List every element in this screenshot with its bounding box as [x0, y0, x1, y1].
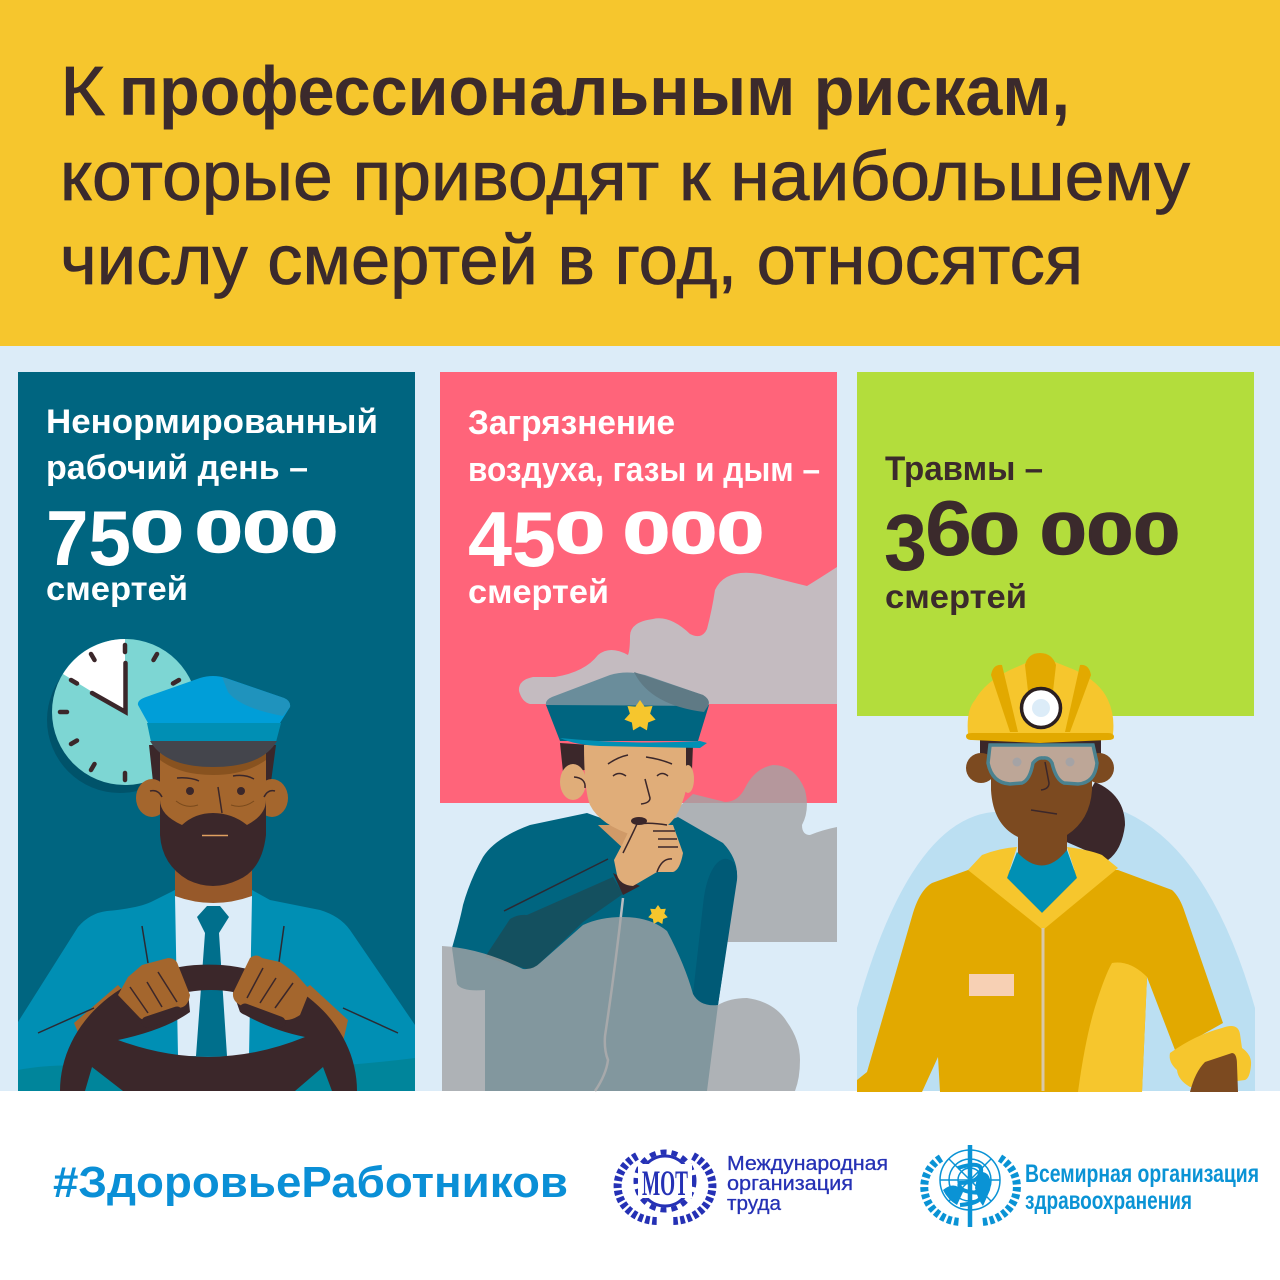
cap: [546, 705, 709, 741]
hand: [1190, 1053, 1238, 1092]
icon: clock: [47, 639, 198, 793]
hair: [980, 740, 1101, 755]
number: 360 000 deaths: 3: [884, 498, 927, 587]
right hand: [233, 956, 310, 1020]
number: 750 000 deaths: 75: [46, 494, 131, 582]
title: числу смертей в год, относятся: [60, 221, 1083, 299]
cuff: [613, 873, 640, 895]
number: 450 000 deaths: 0: [555, 501, 605, 566]
goggles: [988, 745, 1097, 784]
badge star: [648, 905, 668, 924]
title: которые приводят к наибольшему: [60, 137, 1190, 215]
continents: [943, 1172, 990, 1206]
beard: [160, 800, 266, 886]
helmet: [968, 662, 1113, 734]
background arch: [857, 812, 1255, 1091]
cap star: [624, 700, 656, 730]
ears: [560, 764, 586, 800]
number: 360 000 deaths: 0: [969, 502, 1020, 567]
number: 450 000 deaths: смертей: [468, 573, 609, 610]
number: 360 000 deaths: 000: [1040, 502, 1180, 567]
wreath: [924, 1158, 1017, 1222]
number: 450 000 deaths: 000: [623, 501, 764, 566]
visor: [150, 741, 277, 767]
panel heading: irregular hours: [46, 403, 378, 487]
ILO name: [727, 1153, 888, 1215]
cap: [138, 676, 290, 723]
jacket: [857, 870, 1223, 1092]
WHO name: [1025, 1160, 1259, 1215]
headlamp: [1022, 688, 1060, 728]
bottom band: [18, 1058, 415, 1091]
sleeve shade: [693, 859, 737, 1006]
ears: [966, 753, 996, 783]
number: 750 000 deaths: [46, 494, 338, 607]
left hand: [118, 958, 190, 1020]
cable: [595, 898, 623, 1091]
panel: air pollution: [440, 372, 837, 1091]
jacket: [18, 890, 415, 1091]
monogram: МОТ: [642, 1163, 688, 1203]
smoke: upper cloud: [519, 567, 837, 704]
panel heading: air pollution: Загрязнение: [468, 404, 675, 442]
fist: [614, 824, 683, 886]
title: профессиональным рискам,: [119, 52, 1070, 130]
name patch: [969, 974, 1014, 996]
illustration: coughing policeman: [452, 672, 737, 1091]
smoke: right cloud: [670, 765, 837, 942]
panel heading: air pollution: [468, 404, 820, 489]
logo: WHO: [924, 1145, 1017, 1227]
tie: [196, 906, 229, 1056]
illustration: miner: [857, 653, 1251, 1092]
ILO name: организация: [727, 1173, 853, 1195]
face: [584, 745, 686, 836]
ILO name: Международная: [727, 1153, 888, 1175]
visor: [560, 738, 707, 748]
footer hashtag: #ЗдоровьеРаботников: [53, 1158, 568, 1207]
mouth and nose: [1031, 762, 1057, 814]
number: 450 000 deaths: [468, 495, 764, 610]
number: 360 000 deaths: 6: [925, 484, 972, 572]
wreath: [618, 1156, 712, 1221]
number: 450 000 deaths: 45: [468, 495, 556, 583]
ears: [136, 779, 168, 817]
panel: irregular working hours: [18, 372, 415, 1091]
wrists: [74, 985, 348, 1042]
arm shade: [485, 877, 623, 969]
facial details: [574, 755, 672, 804]
facial details: [150, 775, 275, 836]
number: 750 000 deaths: 0: [130, 500, 184, 565]
shirt: [175, 896, 252, 1056]
collar: [968, 847, 1118, 930]
title: К: [60, 52, 105, 130]
ILO name: труда: [727, 1193, 782, 1215]
ponytail: [1062, 782, 1125, 860]
shirt: [1007, 850, 1077, 913]
jacket creases: [38, 926, 398, 1033]
header banner: [0, 0, 1280, 346]
WHO name: здравоохранения: [1025, 1187, 1192, 1215]
logo: ILO: [618, 1152, 712, 1221]
steering wheel: [60, 965, 357, 1091]
title: [60, 52, 1190, 299]
globe: [940, 1150, 1000, 1210]
number: 750 000 deaths: 000: [195, 500, 338, 565]
zip: [1042, 928, 1044, 1091]
hair: [560, 743, 693, 772]
neck: [175, 860, 252, 904]
cuff: [1170, 1026, 1251, 1087]
fist lines: [623, 823, 678, 872]
panel: injuries: [857, 372, 1255, 1092]
smoke: bottom cloud: [442, 917, 800, 1091]
panel heading: irregular hours: Ненормированный: [46, 403, 378, 441]
panel heading: injuries: Травмы –: [885, 450, 1043, 488]
number: 750 000 deaths: смертей: [46, 570, 188, 607]
hair sides: [149, 745, 276, 782]
panel heading: air pollution: воздуха, газы и дым –: [468, 451, 820, 489]
body: [452, 813, 737, 1091]
illustration: driver: [18, 676, 415, 1091]
face and neck: [991, 745, 1092, 868]
arm crease: [504, 859, 608, 911]
face: [160, 750, 266, 830]
number: 360 000 deaths: смертей: [885, 578, 1027, 615]
number: 360 000 deaths: [884, 484, 1180, 615]
gear: [640, 1156, 690, 1206]
staff and serpent: [968, 1145, 972, 1227]
neck: [598, 825, 640, 850]
sleeve highlight: [1078, 963, 1147, 1092]
panel heading: irregular hours: рабочий день –: [46, 449, 308, 487]
